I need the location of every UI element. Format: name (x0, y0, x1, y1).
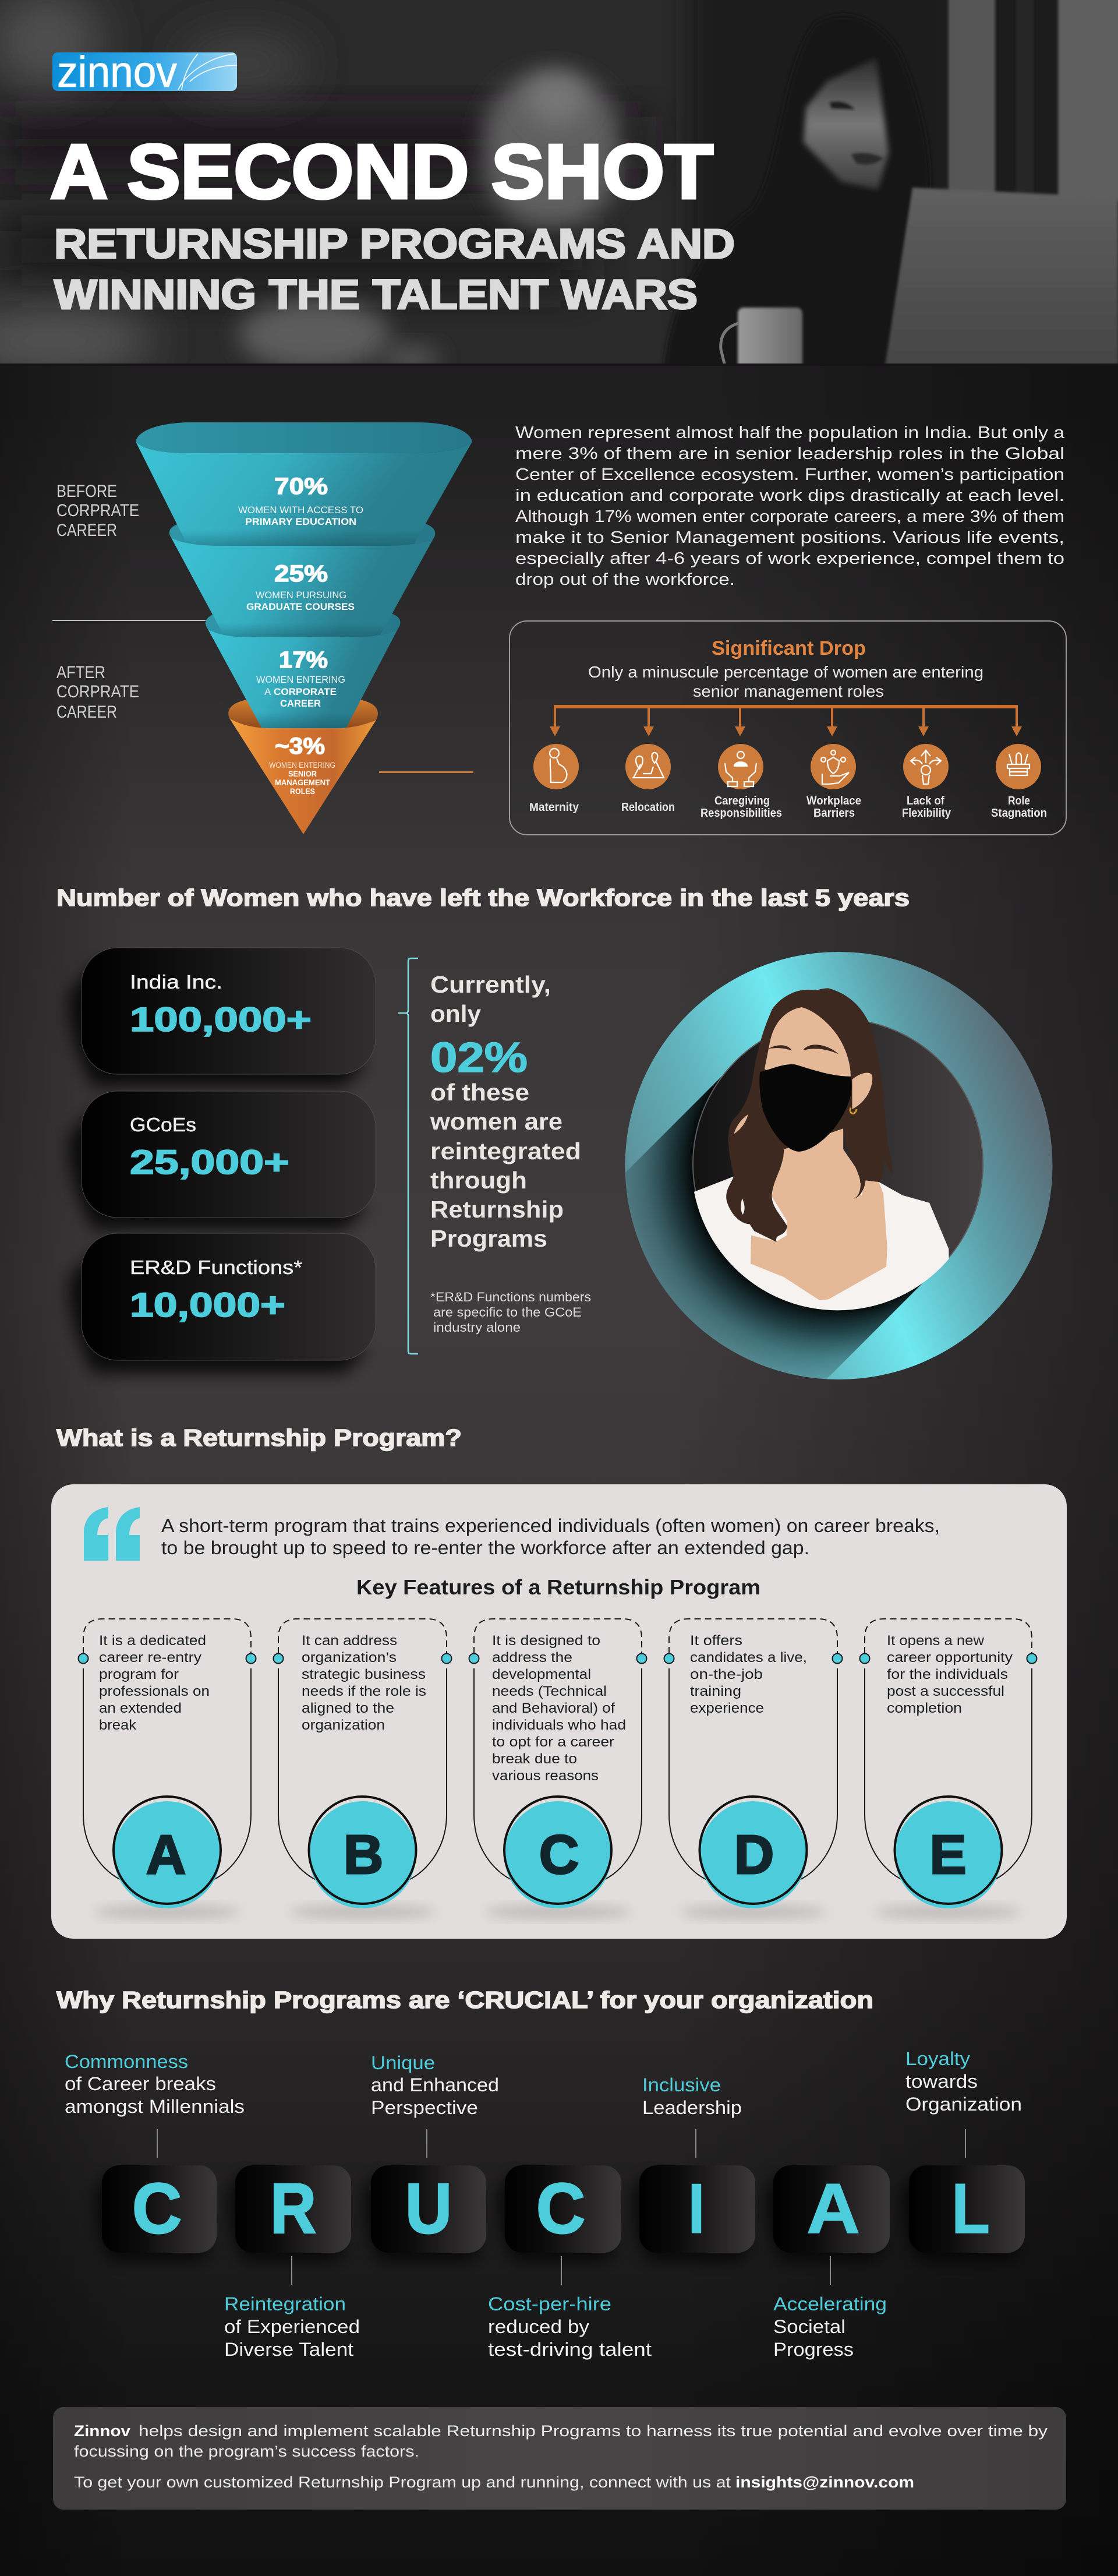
icon labels: Workplace (806, 795, 861, 807)
label: after corporate career (56, 663, 139, 722)
reintegration callout: Programs (430, 1225, 547, 1252)
reintegration callout: reintegrated (430, 1138, 581, 1165)
panel subtitle: senior management roles (693, 682, 884, 700)
feature card A (78, 1619, 256, 1919)
funnel level: about 3%: WOMEN ENTERING (269, 760, 335, 770)
label: inclusive: Inclusive (642, 2074, 721, 2095)
heading: women who left: Number of Women who have left the Workforce in the last 5 years (56, 884, 910, 911)
card: India Inc. (68, 948, 376, 1087)
inner disc (693, 1019, 983, 1309)
funnel chart (136, 422, 472, 834)
illustration (692, 988, 950, 1336)
subtitle: RETURNSHIP PROGRAMS AND (54, 221, 735, 267)
intro paragraph: mere 3% of them are in senior leadership roles in the Global (515, 444, 1064, 463)
icon labels: Caregiving (714, 795, 770, 807)
label: reintegration (224, 2256, 360, 2360)
card: GCoEs: GCoEs (130, 1114, 196, 1135)
definition text: to be brought up to speed to re-enter the workforce after an extended gap. (161, 1537, 809, 1558)
icon labels: Stagnation (991, 807, 1047, 820)
label: after corporate career: CORPRATE (56, 682, 139, 701)
intro paragraph: make it to Senior Management positions. Various life events, (515, 528, 1064, 547)
footer text: To get your own customized Returnship Program up and running, connect with us at (74, 2473, 731, 2491)
feature card B: organization (302, 1717, 385, 1733)
feature card D: training (690, 1684, 741, 1699)
label: commonness: amongst Millennials (65, 2096, 245, 2117)
key C: C (132, 2169, 182, 2248)
reintegration callout: only (430, 1000, 481, 1027)
funnel level: 25%: WOMEN PURSUING (256, 590, 346, 601)
feature card B (274, 1619, 452, 1919)
key C (498, 2165, 621, 2261)
card: ER&D Functions (68, 1233, 376, 1374)
footer text: focussing on the program’s success factors. (74, 2443, 419, 2460)
feature card C: break due to (492, 1751, 577, 1767)
feature card A: an extended (99, 1700, 182, 1716)
heading: what is a returnship program: What is a Returnship Program? (56, 1424, 462, 1451)
funnel level: about 3%: MANAGEMENT (275, 778, 330, 787)
feature card B: B (344, 1824, 383, 1886)
footer text: insights@zinnov.com (735, 2473, 914, 2491)
logo: zinnov (52, 47, 237, 96)
funnel level: 70% (136, 442, 472, 552)
feature card C: developmental (492, 1667, 591, 1682)
footnote (430, 1290, 591, 1335)
feature card C: and Behavioral) of (492, 1700, 615, 1716)
key C: C (536, 2169, 585, 2248)
icon: workplace barriers (811, 744, 856, 789)
footer text: helps design and implement scalable Returnship Programs to harness its true potential and evolve over time by (139, 2422, 1048, 2440)
key I (633, 2165, 755, 2261)
label: reintegration: of Experienced (224, 2316, 360, 2337)
icon: lack of flexibility (903, 744, 949, 789)
key U (365, 2165, 486, 2261)
feature card B: It can address (302, 1633, 397, 1649)
icon labels: Flexibility (902, 807, 951, 820)
feature card E: completion (887, 1700, 962, 1716)
feature card C: address the (492, 1650, 572, 1665)
label: loyalty: towards (905, 2071, 978, 2092)
funnel level: 70%: 70% (274, 474, 328, 499)
feature card B: strategic business (302, 1667, 426, 1682)
feature card C: needs (Technical (492, 1684, 607, 1699)
icon labels: Lack of (907, 795, 944, 807)
footnote: *ER&D Functions numbers (430, 1290, 591, 1304)
label: unique: Perspective (371, 2097, 478, 2118)
feature card D: D (734, 1824, 774, 1886)
feature card E (859, 1619, 1036, 1919)
reintegration callout: Currently, (430, 971, 551, 998)
hero photo banner (0, 0, 1118, 402)
reintegration callout: 02% (430, 1035, 528, 1081)
funnel divider lines (52, 620, 473, 773)
key L: L (951, 2169, 990, 2248)
intro paragraph: Although 17% women enter corporate careers, a mere 3% of them (515, 507, 1064, 526)
label: loyalty (905, 2048, 1022, 2158)
feature card C: individuals who had (492, 1717, 626, 1733)
label: cost-per-hire: test-driving talent (488, 2339, 652, 2360)
funnel level: 17%: 17% (279, 647, 328, 673)
feature card A: break (99, 1717, 137, 1733)
feature card B: aligned to the (302, 1700, 394, 1716)
definition text: A short-term program that trains experienced individuals (often women) on career breaks, (161, 1515, 940, 1536)
key I: I (688, 2169, 705, 2248)
footnote: industry alone (433, 1320, 521, 1335)
panel subtitle (588, 663, 983, 700)
feature card D: experience (690, 1700, 764, 1716)
logo: zinnov: zinnov (57, 47, 177, 96)
feature card A: program for (99, 1667, 179, 1682)
subtitle (54, 221, 735, 318)
footer panel (53, 2407, 1066, 2510)
icon labels: Maternity (529, 801, 579, 814)
funnel level: 17% (208, 629, 398, 733)
icon: quote mark (84, 1507, 140, 1561)
feature card C: It is designed to (492, 1633, 600, 1649)
icon: role stagnation (996, 744, 1041, 789)
label: commonness (65, 2051, 245, 2158)
label: commonness: of Career breaks (65, 2073, 216, 2094)
footer text (74, 2422, 1048, 2491)
funnel level: 17%: CAREER (280, 698, 321, 709)
intro paragraph: drop out of the workforce. (515, 570, 735, 589)
card: ER&D Functions: 10,000+ (130, 1286, 285, 1324)
reintegration callout (430, 971, 581, 1252)
feature card D: on-the-job (690, 1667, 763, 1682)
label: loyalty: Organization (905, 2094, 1022, 2115)
card: GCoEs: 25,000+ (130, 1144, 289, 1181)
orange arrow tree (550, 705, 1022, 736)
panel subtitle: Only a minuscule percentage of women are entering (588, 663, 983, 681)
funnel level: 25% (171, 538, 433, 644)
key C (95, 2165, 217, 2261)
reintegration callout: women are (430, 1108, 562, 1135)
funnel level: 70%: PRIMARY EDUCATION (245, 516, 356, 527)
intro paragraph: Women represent almost half the population in India. But only a (515, 424, 1065, 442)
feature card E: for the individuals (887, 1667, 1008, 1682)
label: before corporate career: BEFORE (56, 482, 117, 501)
panel: significant drop (510, 621, 1066, 835)
ring (625, 952, 1053, 1379)
subtitle: WINNING THE TALENT WARS (54, 272, 698, 318)
feature card D: candidates a live, (690, 1650, 807, 1665)
funnel level: 17%: CORPORATE (274, 686, 337, 697)
feature card D: It offers (690, 1633, 742, 1649)
feature card E: career opportunity (887, 1650, 1013, 1665)
intro paragraph (515, 424, 1065, 589)
funnel level: about 3%: ~3% (275, 733, 325, 759)
icon labels: Relocation (621, 801, 675, 814)
card: GCoEs (68, 1091, 376, 1230)
feature card A: It is a dedicated (99, 1633, 206, 1649)
icon: caregiving (718, 744, 763, 789)
label: inclusive (642, 2074, 742, 2158)
title: A SECOND SHOT (50, 129, 713, 214)
woman portrait in ring (625, 952, 1053, 1379)
feature card E: post a successful (887, 1684, 1004, 1699)
label: accelerating: Societal (773, 2316, 845, 2337)
label: unique: and Enhanced (371, 2074, 499, 2095)
long ring shadow (625, 1076, 924, 1379)
label: reintegration: Reintegration (224, 2293, 346, 2314)
funnel level: 70%: WOMEN WITH ACCESS TO (238, 504, 363, 516)
feature card B: organization’s (302, 1650, 397, 1665)
label: before corporate career: CAREER (56, 521, 117, 540)
feature card C (469, 1619, 646, 1919)
label: accelerating: Progress (773, 2339, 854, 2360)
key L (903, 2165, 1025, 2261)
label: cost-per-hire (488, 2256, 652, 2360)
panel heading: Significant Drop (712, 637, 866, 659)
funnel level: 25%: GRADUATE COURSES (246, 601, 355, 612)
key A (767, 2165, 890, 2261)
card: India Inc.: India Inc. (130, 971, 222, 993)
label: loyalty: Loyalty (905, 2048, 970, 2069)
subheading: key features: Key Features of a Returnship Program (356, 1575, 760, 1599)
icon: maternity (533, 744, 579, 789)
icon labels: Barriers (813, 807, 855, 820)
card: India Inc.: 100,000+ (130, 1001, 312, 1039)
feature card C: to opt for a career (492, 1734, 614, 1750)
funnel level: 17%: WOMEN ENTERING (256, 674, 345, 685)
key U: U (405, 2169, 452, 2248)
label: before corporate career: CORPRATE (56, 501, 139, 520)
key R (229, 2165, 351, 2261)
feature card E: E (929, 1824, 967, 1886)
feature card E: It opens a new (887, 1633, 985, 1649)
funnel level: 25%: 25% (274, 561, 328, 587)
intro paragraph: especially after 4-6 years of work experience, compel them to (515, 549, 1064, 568)
reintegration callout: Returnship (430, 1196, 564, 1223)
feature card C: various reasons (492, 1768, 599, 1784)
icon labels: Role (1008, 795, 1030, 807)
definition text (161, 1515, 940, 1558)
label: unique: Unique (371, 2052, 435, 2073)
bracket (398, 958, 418, 1354)
label: reintegration: Diverse Talent (224, 2339, 353, 2360)
reintegration callout: through (430, 1167, 527, 1194)
icon labels: Responsibilities (700, 807, 782, 820)
footer text: Zinnov (74, 2422, 130, 2440)
label: cost-per-hire: Cost-per-hire (488, 2293, 611, 2314)
icon: relocation (625, 744, 671, 789)
key A: A (806, 2169, 860, 2248)
label: cost-per-hire: reduced by (488, 2316, 589, 2337)
panel: returnship definition and features (51, 1484, 1067, 1939)
footnote: are specific to the GCoE (433, 1305, 582, 1319)
key R: R (270, 2169, 316, 2248)
label: accelerating (773, 2256, 887, 2360)
feature card A: professionals on (99, 1684, 210, 1699)
card: ER&D Functions: ER&D Functions* (130, 1257, 302, 1278)
label: before corporate career (56, 482, 139, 540)
funnel level: about 3%: SENIOR (288, 769, 317, 778)
reintegration callout: of these (430, 1079, 529, 1106)
label: inclusive: Leadership (642, 2097, 742, 2118)
feature card D (664, 1619, 842, 1919)
label: after corporate career: AFTER (56, 663, 105, 682)
intro paragraph: Center of Excellence ecosystem. Further, women’s participation (515, 465, 1064, 484)
funnel level: 17%: A (264, 686, 271, 697)
funnel level: about 3% (229, 718, 376, 834)
feature card B: needs if the role is (302, 1684, 426, 1699)
feature card A: career re-entry (99, 1650, 201, 1665)
intro paragraph: in education and corporate work dips drastically at each level. (515, 486, 1064, 505)
feature card A: A (146, 1824, 186, 1886)
heading: why crucial: Why Returnship Programs are ‘CRUCIAL’ for your organization (56, 1986, 873, 2013)
icon labels (529, 795, 1047, 820)
label: commonness: Commonness (65, 2051, 188, 2072)
label: accelerating: Accelerating (773, 2293, 887, 2314)
funnel level: about 3%: ROLES (290, 786, 315, 796)
label: unique (371, 2052, 499, 2158)
key letters: CRUCIAL (95, 2165, 1025, 2261)
label: after corporate career: CAREER (56, 703, 117, 722)
feature card C: C (539, 1824, 579, 1886)
